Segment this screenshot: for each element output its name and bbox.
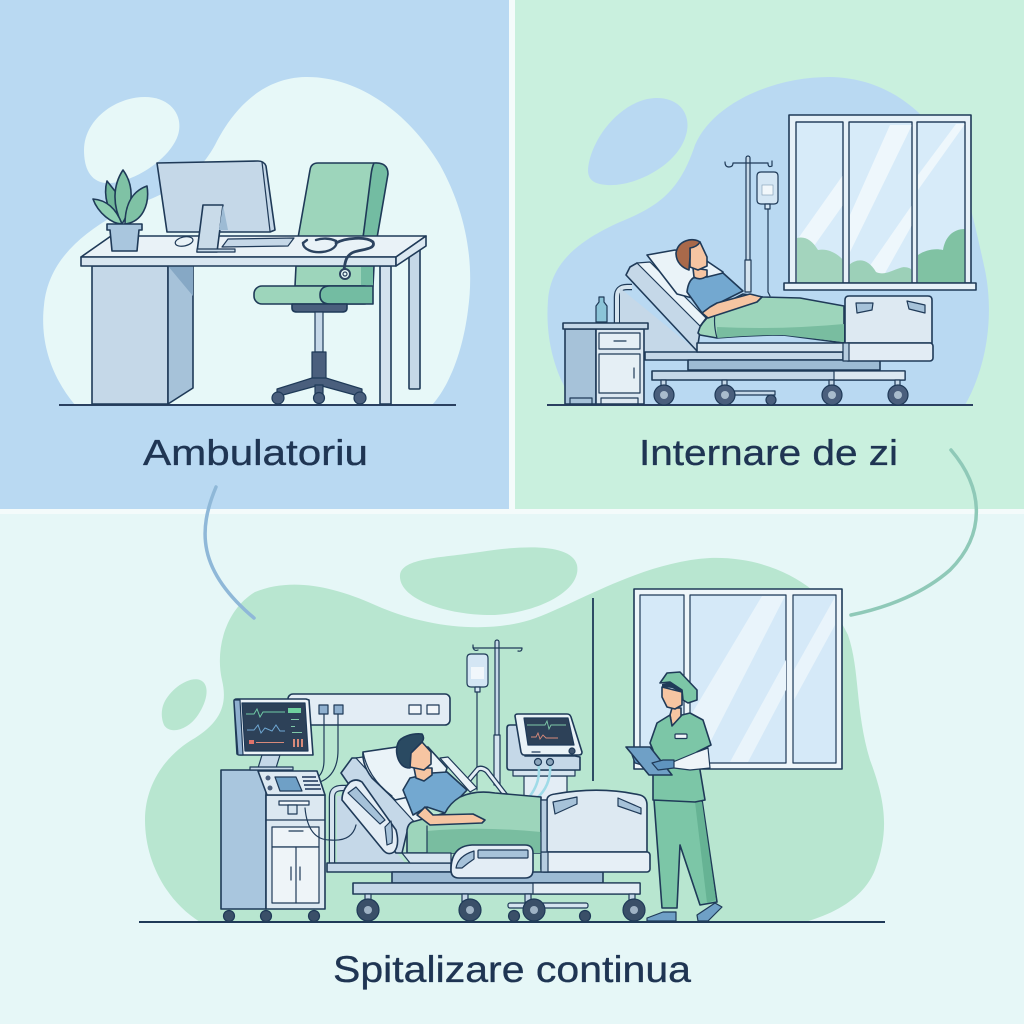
bed [327, 734, 650, 922]
nurse white sleeve [673, 748, 710, 770]
window [784, 115, 976, 290]
keyboard [222, 238, 294, 247]
blanket [407, 792, 541, 853]
panel: Internare de zi [515, 0, 1024, 509]
IV stand [467, 640, 522, 790]
nurse [626, 672, 722, 921]
nurse shoes [647, 912, 676, 921]
background blob: day care [547, 77, 989, 405]
label: Internare de zi: Internare de zi [639, 432, 898, 473]
pillow [363, 747, 447, 800]
clipboard [626, 747, 672, 775]
label: Spitalizare continua: Spitalizare continua [333, 949, 691, 990]
chair [254, 163, 388, 404]
wall divider [592, 598, 594, 781]
bed wheels [654, 380, 908, 405]
background blob: outpatient [43, 77, 470, 405]
nurse head [662, 687, 682, 709]
mattress strip [402, 853, 451, 863]
label: Ambulatoriu: Ambulatoriu [143, 432, 368, 473]
nurse tunic [650, 713, 711, 802]
desk [81, 236, 426, 404]
ground line [59, 404, 456, 406]
backrest [341, 758, 423, 853]
far rail [467, 768, 507, 797]
patient monitor cart [221, 699, 356, 922]
hospital bed [617, 240, 933, 405]
ground line [139, 921, 885, 923]
footboard [541, 790, 650, 872]
ventilator [507, 714, 582, 800]
backrest and mattress [626, 263, 702, 351]
side rail foot [451, 845, 533, 878]
plant [93, 170, 148, 251]
bedside monitor [234, 699, 313, 770]
bedside table [563, 297, 648, 404]
nurse right glove [652, 760, 674, 770]
wall service panel [288, 694, 450, 782]
background blob: inpatient [145, 547, 884, 922]
window [634, 589, 842, 769]
IV stand [725, 156, 778, 296]
mouse [174, 235, 194, 248]
connector: Internare to Spitalizare [851, 450, 976, 615]
nurse trousers [654, 800, 717, 908]
ground line [547, 404, 973, 406]
stethoscope [303, 238, 373, 279]
panel: Ambulatoriu [0, 0, 509, 509]
footboard [843, 296, 933, 361]
monitor [157, 161, 275, 252]
bed wheels [357, 894, 645, 922]
connector: Ambulatoriu to Spitalizare [205, 487, 254, 618]
side rail head [342, 780, 398, 854]
nurse left glove [632, 755, 642, 765]
patient [397, 734, 467, 815]
pillow [647, 250, 723, 300]
nurse neck [670, 708, 681, 726]
blanket [698, 294, 844, 343]
patient [676, 240, 743, 313]
water bottle [596, 297, 607, 322]
panel: Spitalizare continua [0, 514, 1024, 1024]
